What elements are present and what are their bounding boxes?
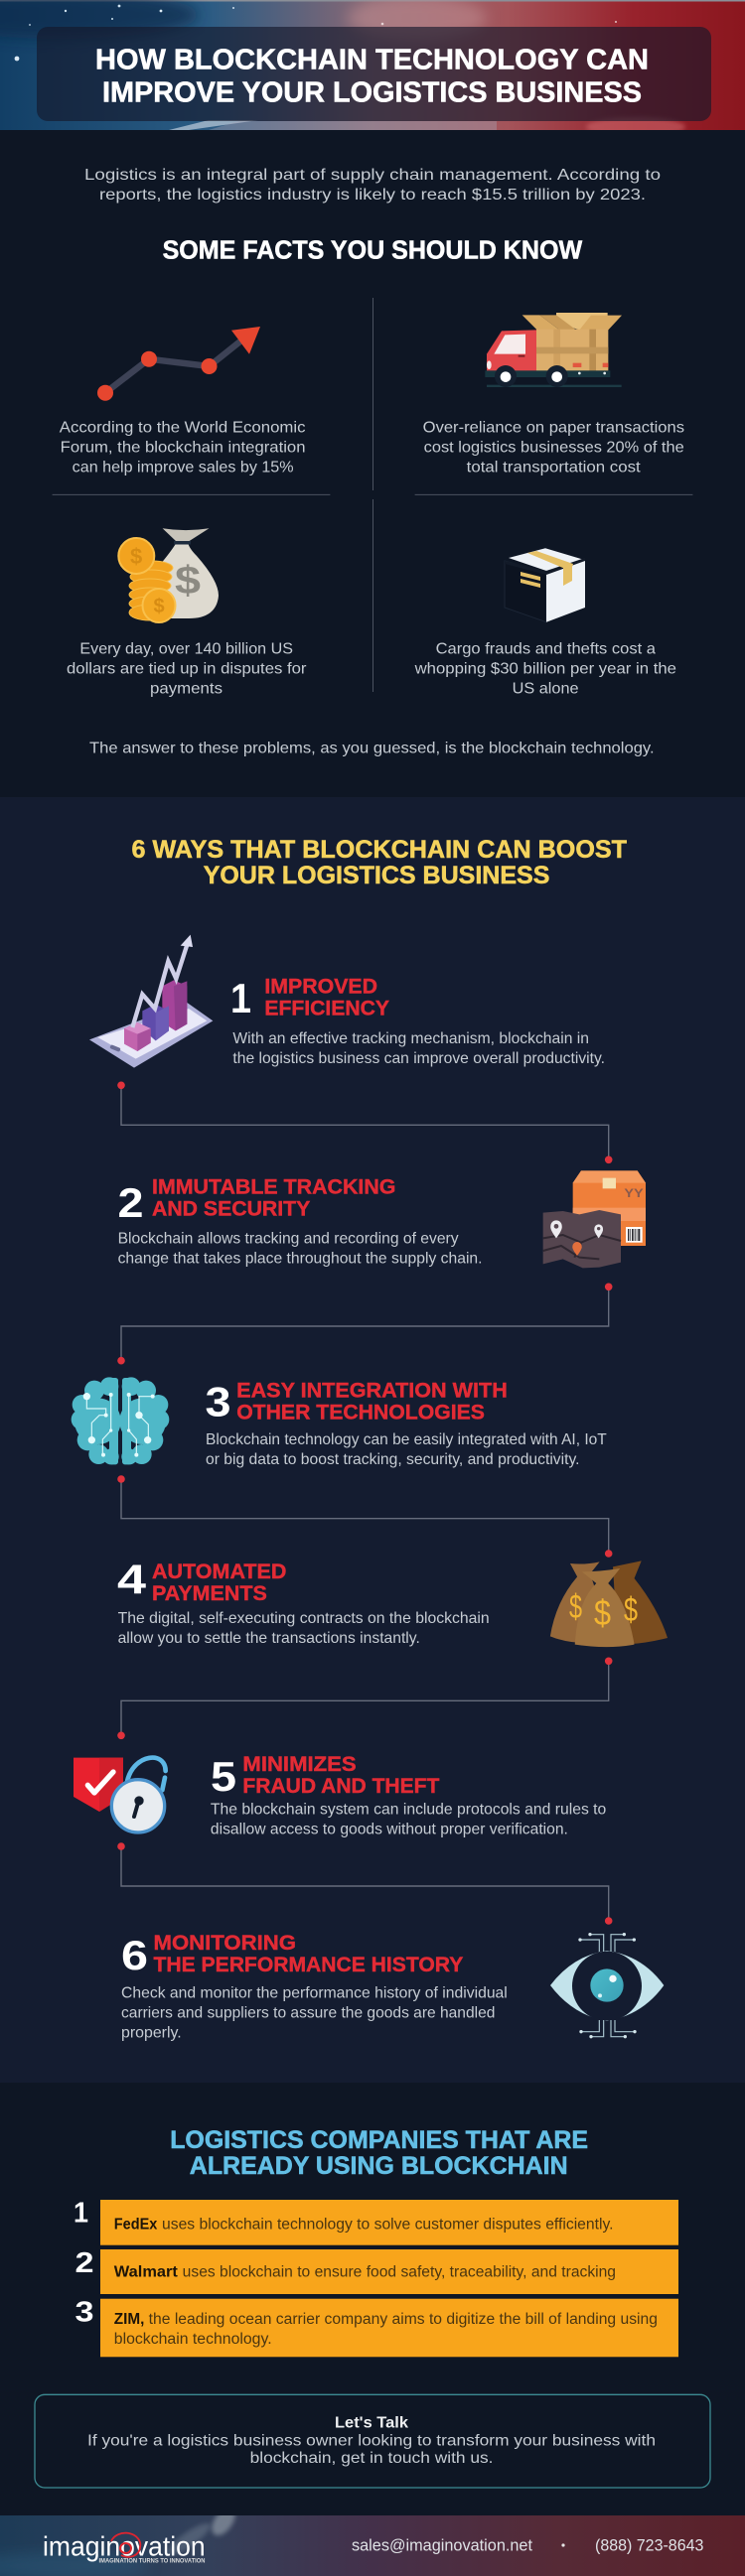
- title panel: IMPROVE YOUR LOGISTICS BUSINESS: [102, 77, 642, 109]
- heading: logistics companies: ALREADY USING BLOCKCHAIN: [190, 2152, 568, 2180]
- icon: cardboard box: [505, 548, 585, 622]
- step text: Blockchain technology can be easily integrated with AI, IoT: [206, 1431, 607, 1448]
- company: ZIM: [75, 2297, 678, 2357]
- step heading: FRAUD AND THEFT: [242, 1774, 439, 1798]
- step heading: [242, 1752, 439, 1798]
- step text: the logistics business can improve overall productivity.: [232, 1050, 605, 1067]
- step heading: IMPROVED: [264, 974, 377, 998]
- intro text: [84, 167, 661, 203]
- icon: parcel and map: [543, 1170, 646, 1268]
- step heading: AUTOMATED: [152, 1559, 286, 1583]
- step number: 5: [211, 1753, 236, 1800]
- callout: let's talk: Let's Talk: [335, 2415, 408, 2432]
- icon: shield and padlock: [74, 1758, 166, 1832]
- icon: money bag and coins: [118, 528, 219, 622]
- icon: money bag and coins: $: [153, 596, 165, 617]
- step number: 4: [117, 1557, 147, 1603]
- step 4: automated payments: [117, 1557, 668, 1647]
- step text: [118, 1610, 490, 1647]
- step heading: [152, 1559, 286, 1605]
- fact: cargo frauds: Cargo frauds and thefts cost a: [436, 641, 656, 658]
- icon: phone with bar chart: [89, 935, 213, 1068]
- step heading: [152, 1174, 395, 1220]
- heading: logistics companies: [170, 2126, 588, 2180]
- fact: sales: According to the World Economic: [60, 420, 305, 437]
- icon: circuit brain: [72, 1377, 169, 1464]
- icon: money bag and coins: $: [130, 544, 142, 569]
- step heading: [153, 1931, 463, 1976]
- step heading: [236, 1379, 508, 1424]
- step text: Blockchain allows tracking and recording of every: [118, 1230, 459, 1247]
- company: FedEx: FedEx: [114, 2217, 158, 2234]
- step number: 3: [205, 1379, 230, 1425]
- title panel: [37, 27, 711, 121]
- fact: sales: can help improve sales by 15%: [73, 460, 294, 476]
- icon: three money sacks: $: [624, 1591, 638, 1629]
- step text: [118, 1230, 482, 1267]
- panel: facts grid: [53, 298, 692, 698]
- icon: digital eye: [550, 1933, 664, 2038]
- fact: paper transactions: [423, 420, 684, 476]
- contact details: [352, 2535, 703, 2555]
- heading: 6 ways: 6 WAYS THAT BLOCKCHAIN CAN BOOST: [131, 836, 627, 864]
- fact: disputes: [67, 641, 307, 698]
- fact: sales: Forum, the blockchain integration: [61, 440, 306, 457]
- step heading: EFFICIENCY: [264, 996, 389, 1019]
- fact: paper transactions: cost logistics businesses 20% of the: [424, 440, 684, 457]
- step text: change that takes place throughout the supply chain.: [118, 1250, 482, 1267]
- footer band: [0, 2515, 745, 2576]
- heading: logistics companies: LOGISTICS COMPANIES THAT ARE: [170, 2126, 588, 2154]
- step text: [121, 1984, 508, 2041]
- icon: parcel and map: YY: [624, 1186, 644, 1200]
- fact: disputes: dollars are tied up in disputes for: [67, 661, 307, 678]
- fact: paper transactions: Over-reliance on paper transactions: [423, 420, 684, 437]
- fact: cargo frauds: [414, 641, 676, 698]
- company: ZIM: 3: [75, 2297, 93, 2329]
- step text: With an effective tracking mechanism, blockchain in: [232, 1030, 589, 1047]
- callout: let's talk: [35, 2394, 710, 2488]
- step 1: improved efficiency: [89, 935, 605, 1068]
- header banner: [0, 0, 745, 137]
- company: Walmart: uses blockchain to ensure food safety, traceability, and tracking: [183, 2263, 616, 2280]
- icon: three money sacks: $: [594, 1592, 611, 1633]
- logo: imaginovation: IMAGINATION TURNS TO INNOVATION: [99, 2558, 206, 2565]
- intro text: reports, the logistics industry is likely to reach $15.5 trillion by 2023.: [99, 187, 646, 203]
- title panel: HOW BLOCKCHAIN TECHNOLOGY CAN: [95, 44, 649, 75]
- icon: money bag and coins: $: [175, 559, 201, 603]
- step text: or big data to boost tracking, security, and productivity.: [206, 1451, 580, 1468]
- step 3: easy integration: [72, 1377, 607, 1468]
- step 5: minimizes fraud: [74, 1752, 606, 1837]
- step text: carriers and suppliers to assure the goods are handled: [121, 2004, 495, 2021]
- step text: [206, 1431, 607, 1468]
- company: ZIM: the leading ocean carrier company aims to digitize the bill of landing using: [149, 2311, 658, 2328]
- company: Walmart: [75, 2247, 678, 2294]
- heading: some facts: SOME FACTS YOU SHOULD KNOW: [163, 235, 583, 265]
- heading: 6 ways: YOUR LOGISTICS BUSINESS: [204, 862, 549, 889]
- company: FedEx: uses blockchain technology to solve customer disputes efficiently.: [162, 2217, 614, 2234]
- callout: let's talk: blockchain, get in touch with us.: [250, 2450, 493, 2467]
- company: Walmart: Walmart: [114, 2263, 178, 2280]
- logo: imaginovation: imaginovation: [43, 2530, 206, 2561]
- fact: disputes: Every day, over 140 billion US: [79, 641, 293, 658]
- company: ZIM: blockchain technology.: [114, 2331, 272, 2348]
- icon: delivery truck: [485, 313, 622, 387]
- intro text: Logistics is an integral part of supply chain management. According to: [84, 167, 661, 184]
- step text: allow you to settle the transactions instantly.: [118, 1630, 420, 1647]
- step heading: EASY INTEGRATION WITH: [236, 1379, 508, 1403]
- step number: 1: [230, 975, 251, 1021]
- company: FedEx: [74, 2197, 678, 2245]
- step text: disallow access to goods without proper verification.: [211, 1821, 568, 1837]
- step 6: monitoring: [121, 1931, 664, 2041]
- step text: properly.: [121, 2024, 182, 2041]
- callout: let's talk: If you're a logistics business owner looking to transform your business with: [87, 2432, 656, 2449]
- step number: 6: [121, 1932, 148, 1978]
- icon: rising line chart: [97, 327, 260, 401]
- connectors between steps: [117, 1082, 612, 1925]
- step 2: immutable tracking: [117, 1170, 646, 1268]
- step heading: IMMUTABLE TRACKING: [152, 1174, 395, 1198]
- step text: Check and monitor the performance history of individual: [121, 1984, 508, 2001]
- fact: cargo frauds: US alone: [513, 681, 579, 698]
- company: ZIM: ZIM,: [114, 2311, 144, 2328]
- icon: three money sacks: [550, 1560, 668, 1647]
- company: FedEx: 1: [74, 2197, 88, 2229]
- fact: sales: [60, 420, 305, 476]
- step heading: [264, 974, 389, 1019]
- heading: 6 ways: [131, 836, 627, 889]
- step heading: THE PERFORMANCE HISTORY: [153, 1953, 463, 1976]
- step number: 2: [117, 1179, 143, 1226]
- step text: [211, 1801, 606, 1837]
- answer text: The answer to these problems, as you guessed, is the blockchain technology.: [89, 740, 655, 756]
- company: Walmart: 2: [75, 2247, 93, 2279]
- fact: paper transactions: total transportation cost: [467, 460, 641, 476]
- step text: [232, 1030, 605, 1067]
- step heading: PAYMENTS: [152, 1581, 267, 1605]
- fact: cargo frauds: whopping $30 billion per year in the: [414, 661, 676, 678]
- step heading: AND SECURITY: [152, 1196, 310, 1220]
- step heading: MINIMIZES: [242, 1752, 357, 1776]
- contact details: sales@imaginovation.net: [352, 2535, 532, 2554]
- step text: The blockchain system can include protocols and rules to: [211, 1801, 606, 1818]
- contact details: (888) 723-8643: [595, 2536, 703, 2555]
- step text: The digital, self-executing contracts on the blockchain: [118, 1610, 490, 1627]
- icon: three money sacks: $: [569, 1588, 582, 1626]
- step heading: OTHER TECHNOLOGIES: [236, 1401, 485, 1424]
- step heading: MONITORING: [153, 1931, 296, 1955]
- fact: disputes: payments: [150, 681, 223, 698]
- company list: [74, 2197, 678, 2357]
